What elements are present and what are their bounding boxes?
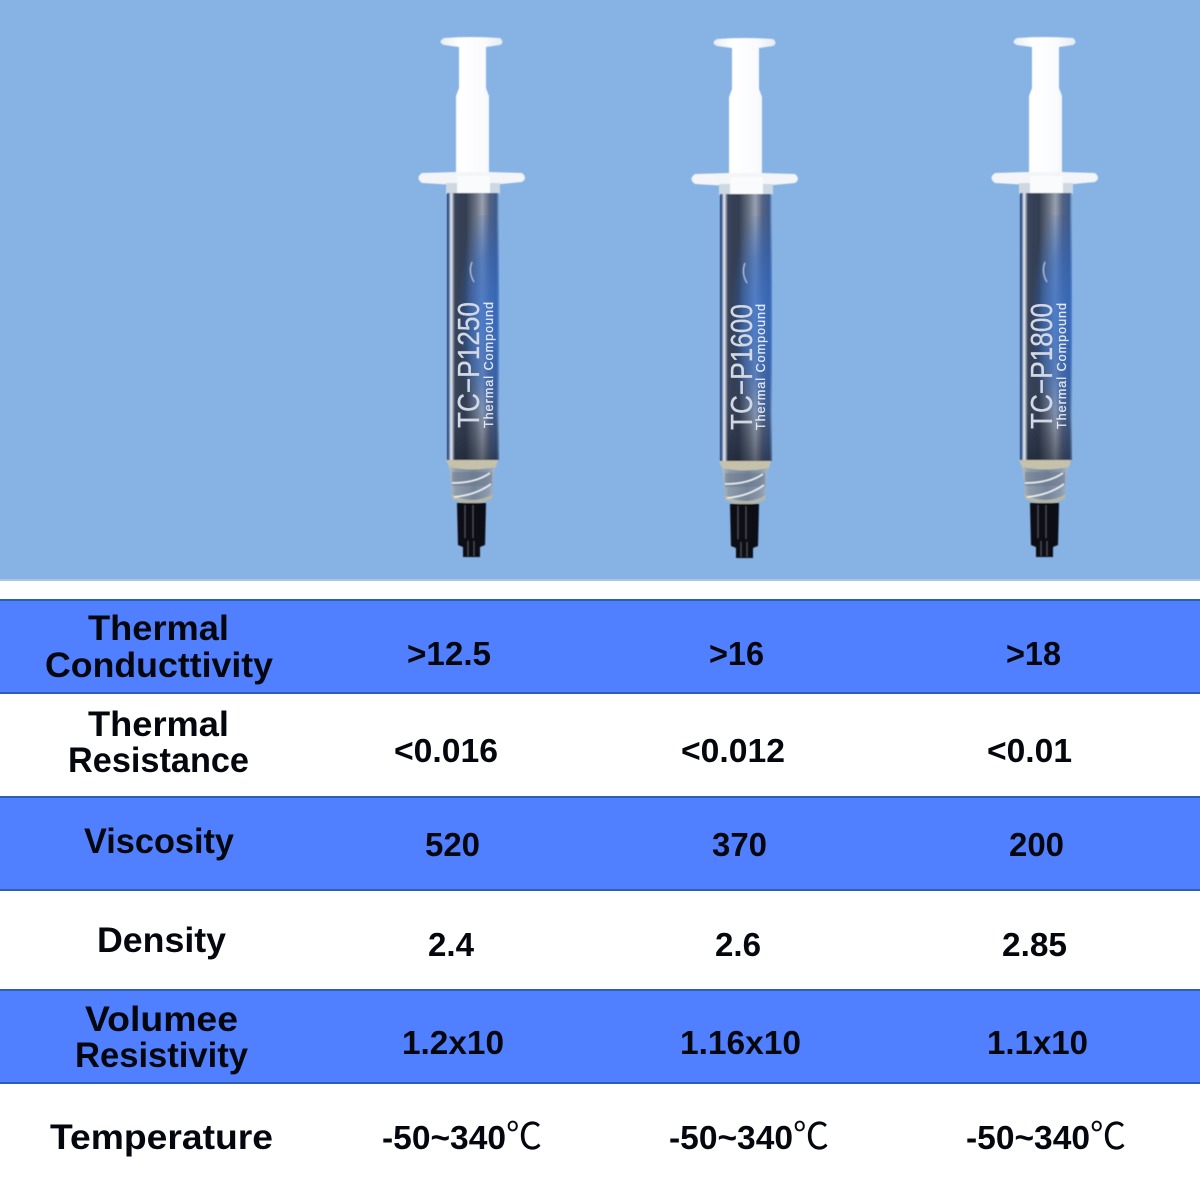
syringe: TC-P1800: Thermal Compound — [1055, 303, 1069, 429]
syringe: TC-P1600: Thermal Compound — [754, 304, 768, 430]
syringe: TC-P1800: TC−P1800 — [1024, 303, 1059, 429]
row: thermal resistance: <0.01 — [987, 732, 1072, 769]
row: volume resistivity: 1.1x10 — [987, 1024, 1088, 1061]
row: thermal conductivity: >18 — [1006, 635, 1061, 672]
row: viscosity: 520 — [425, 826, 480, 863]
row: viscosity — [84, 822, 1064, 863]
row: volume resistivity: 1.2x10 — [402, 1024, 504, 1061]
row: temperature: -50~340 — [382, 1119, 506, 1156]
row: volume resistivity: Resistivity — [75, 1036, 249, 1075]
row: thermal conductivity — [45, 609, 1061, 685]
row: temperature: Temperature — [50, 1118, 273, 1157]
panel: specification table — [0, 579, 1200, 1200]
syringe: TC-P1250: Thermal Compound — [482, 302, 496, 428]
row: viscosity: 200 — [1009, 826, 1064, 863]
row: thermal resistance: <0.012 — [681, 732, 785, 769]
row: density: 2.6 — [715, 926, 761, 963]
syringe: TC-P1800 — [992, 37, 1098, 557]
row: density: Density — [97, 921, 227, 960]
row: temperature: -50~340 — [669, 1119, 793, 1156]
syringe: TC-P1250: TC−P1250 — [451, 302, 486, 428]
row: temperature: ℃ — [793, 1106, 829, 1160]
row: temperature: ℃ — [506, 1106, 542, 1160]
panel: blue product background — [0, 0, 1200, 580]
row: temperature — [50, 1106, 1126, 1160]
row: thermal resistance: <0.016 — [394, 732, 498, 769]
syringe: TC-P1600 — [692, 38, 798, 558]
row: thermal resistance: Resistance — [68, 741, 249, 780]
row: thermal conductivity: >16 — [709, 635, 764, 672]
row: thermal resistance — [68, 705, 1072, 780]
row: density: 2.4 — [428, 926, 475, 963]
row: thermal conductivity: Thermal — [88, 609, 229, 648]
row: volume resistivity — [75, 1000, 1088, 1075]
row: volume resistivity: Volumee — [85, 1000, 238, 1039]
row: thermal conductivity: >12.5 — [407, 635, 491, 672]
row: density — [97, 921, 1067, 963]
syringe: TC-P1250 — [418, 37, 525, 557]
row: thermal resistance: Thermal — [88, 705, 229, 744]
row: viscosity: Viscosity — [84, 822, 235, 861]
syringe: TC-P1600: TC−P1600 — [724, 304, 759, 430]
row: viscosity: 370 — [712, 826, 767, 863]
row: volume resistivity: 1.16x10 — [680, 1024, 801, 1061]
row: temperature: ℃ — [1090, 1106, 1126, 1160]
row: density: 2.85 — [1002, 926, 1067, 963]
row: temperature: -50~340 — [966, 1119, 1090, 1156]
row: thermal conductivity: Conducttivity — [45, 646, 274, 685]
